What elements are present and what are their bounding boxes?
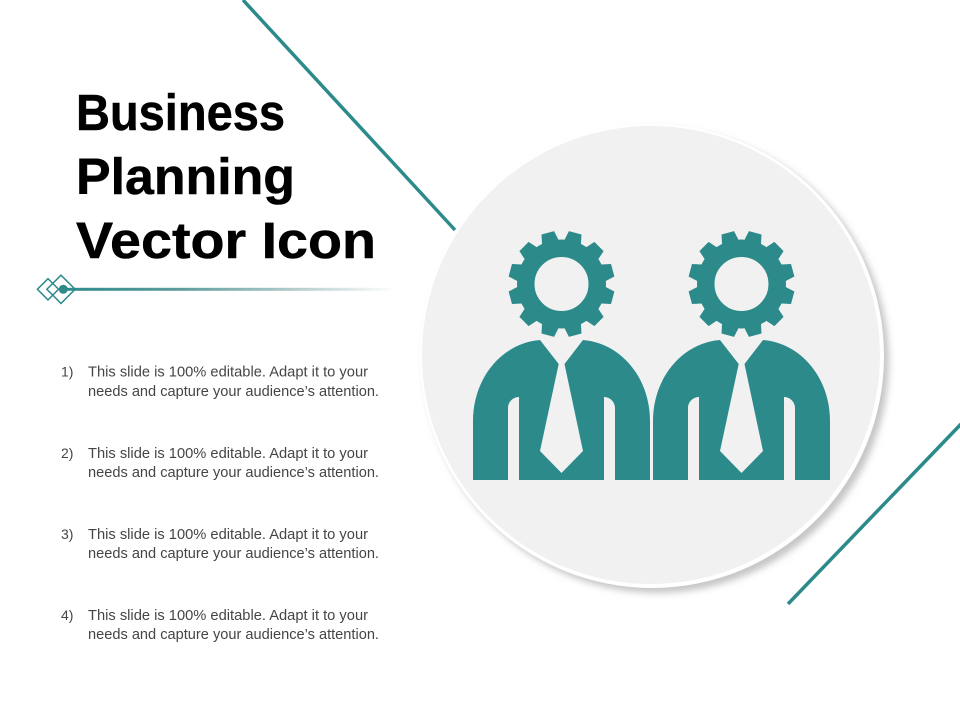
list item 4: needs and capture your audience’s attention. [88, 627, 379, 643]
title: Business [76, 84, 285, 141]
icon: gear [508, 231, 615, 337]
list item 4: This slide is 100% editable. Adapt it to your [88, 608, 368, 624]
list item 3 [61, 526, 379, 562]
title: Vector Icon [76, 212, 376, 269]
icon: right businessman with gear head [653, 231, 830, 480]
bottom right diagonal line [788, 424, 960, 604]
top diagonal line [243, 0, 455, 230]
title [76, 84, 376, 269]
list item 3: This slide is 100% editable. Adapt it to your [88, 527, 368, 543]
list item 1: 1) [61, 364, 73, 380]
list item 1: This slide is 100% editable. Adapt it to your [88, 364, 368, 380]
numbered list [61, 364, 379, 643]
list item 4 [61, 607, 379, 643]
divider with diamonds [37, 275, 396, 303]
list item 1: needs and capture your audience’s attention. [88, 384, 379, 400]
list item 2 [61, 445, 379, 481]
icon: suit [653, 340, 830, 480]
list item 3: 3) [61, 526, 73, 542]
icon: left businessman with gear head [473, 231, 650, 480]
circle panel [420, 124, 889, 593]
list item 2: needs and capture your audience’s attention. [88, 465, 379, 481]
title: Planning [76, 148, 295, 205]
icon: suit [473, 340, 650, 480]
icon: gear [688, 231, 795, 337]
list item 1 [61, 364, 379, 400]
list item 2: This slide is 100% editable. Adapt it to your [88, 446, 368, 462]
list item 3: needs and capture your audience’s attention. [88, 546, 379, 562]
list item 2: 2) [61, 445, 73, 461]
list item 4: 4) [61, 607, 73, 623]
